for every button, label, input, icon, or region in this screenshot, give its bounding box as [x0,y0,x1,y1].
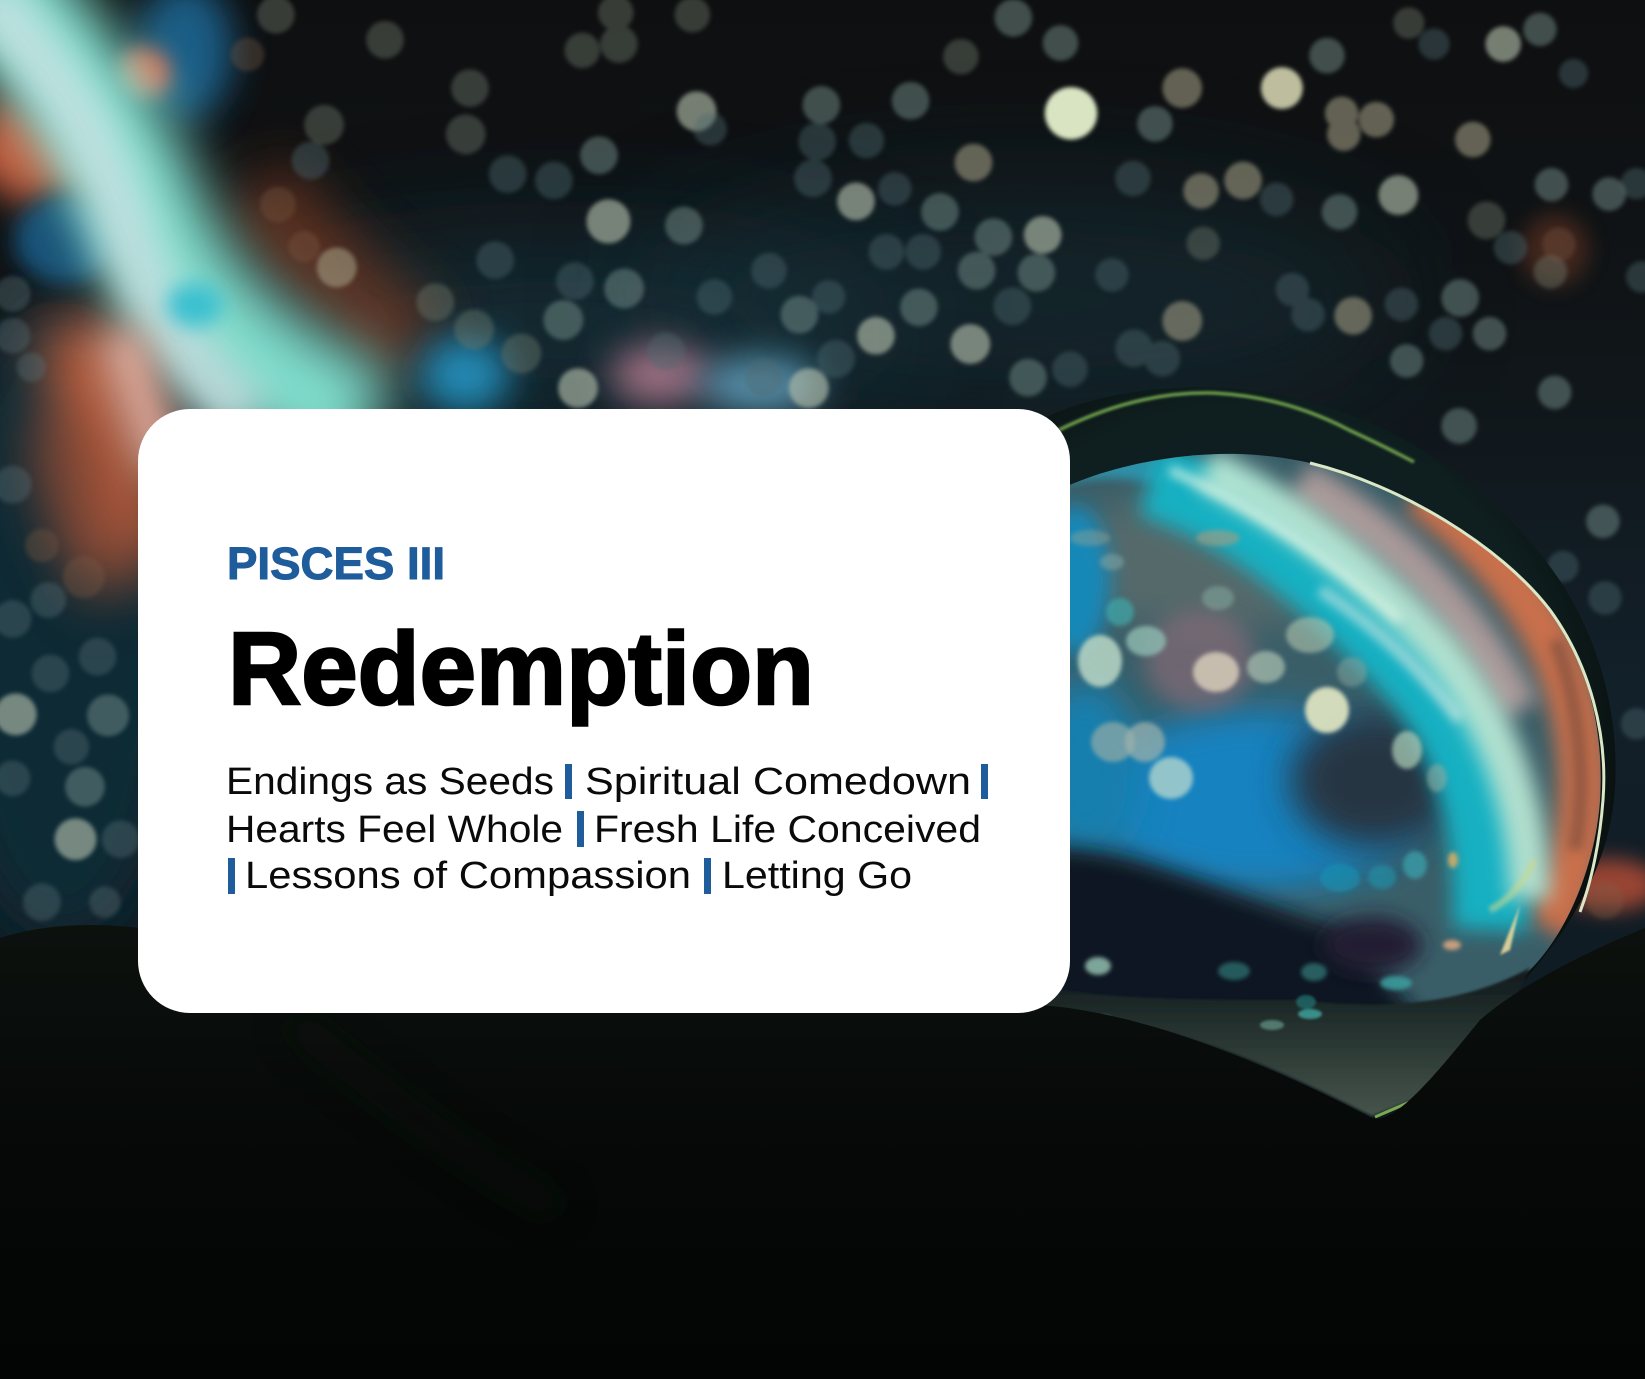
glass body [1040,387,1616,1060]
dark foreground ground [0,925,1645,1379]
green rim highlight [1059,393,1414,462]
crystal ball [1030,387,1640,1117]
green base glint [1375,1101,1412,1117]
background: blurred nebula band [0,0,1645,940]
ground fold highlight [290,1020,560,1210]
white rim highlight [1310,463,1604,912]
reflected nebula inside ball [1066,454,1601,1004]
white card panel [138,409,1070,1013]
subtitle: Pisces III: PISCES III [227,538,445,589]
keyword list: Fresh Life Conceived [594,809,981,851]
keyword list: Lessons of Compassion [245,855,691,897]
keyword list: Hearts Feel Whole [226,809,563,851]
keyword list [226,761,988,897]
keyword list: Letting Go [722,855,912,897]
background: bokeh light circles [0,0,1645,921]
keyword list: Endings as Seeds [226,761,554,803]
keyword list: Spiritual Comedown [585,761,971,803]
lower glass reflection [1040,968,1530,1116]
title: Redemption: Redemption [228,611,814,726]
interior bokeh [1070,530,1461,990]
